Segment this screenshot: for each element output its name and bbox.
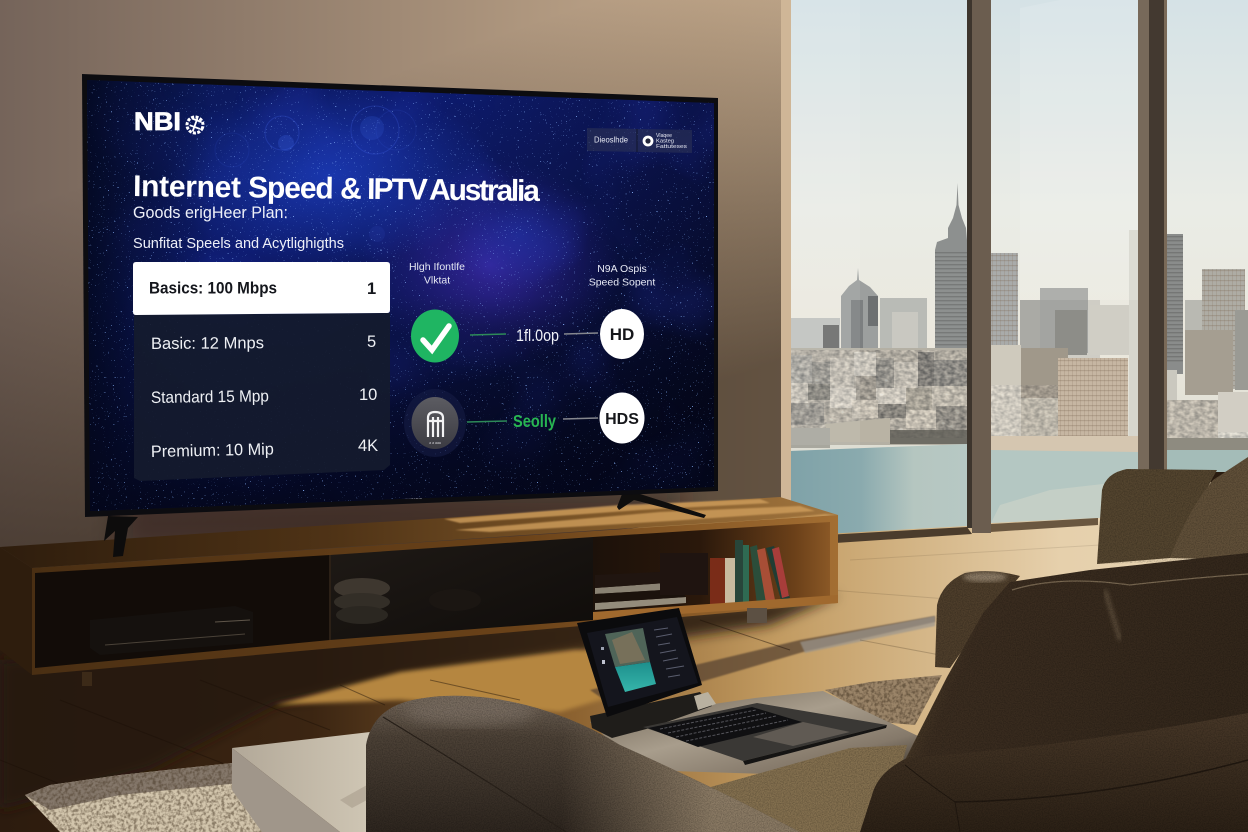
wall [0, 0, 792, 570]
trackpad [753, 722, 850, 746]
long window shadow [590, 616, 935, 704]
wall return [781, 0, 791, 510]
badge: HD: HD [610, 325, 634, 344]
open bookshelf [593, 522, 838, 620]
tan sofa seat [700, 745, 907, 832]
laptop [577, 608, 887, 765]
floor plank lines [0, 545, 1100, 832]
bridge [825, 418, 890, 438]
round tower [841, 268, 878, 348]
badge: HD [600, 309, 644, 359]
magazines [595, 582, 680, 594]
top-right badge: Fattuteses [656, 144, 687, 150]
laptop deck [643, 703, 887, 761]
title: Internet [133, 170, 241, 204]
tv stand right [617, 489, 706, 518]
subtitle: Goods erigHeer Plan: [133, 203, 288, 222]
back cushion [905, 553, 1248, 800]
title: IPTV [367, 173, 428, 207]
tv bezel [82, 74, 718, 517]
plan row: standard [151, 386, 377, 407]
column label right [589, 263, 655, 288]
plan row: premium: Premium: 10 Mip [151, 440, 274, 461]
fabric grain [366, 457, 1248, 832]
books [710, 540, 790, 605]
icon: grey arch badge [404, 389, 466, 457]
top-right badge: Vlaqee [656, 133, 672, 139]
logo emblem [185, 115, 205, 135]
plan row: standard: 10 [359, 386, 377, 404]
decorative orbs [215, 106, 416, 167]
tv brand: DIMENSION [396, 495, 422, 500]
column label right: Speed Sopent [589, 276, 655, 288]
plan list background [134, 313, 390, 481]
laptop lid [577, 608, 702, 717]
sunlight stripes on console top [444, 499, 838, 540]
console leg [747, 608, 767, 623]
media console [0, 497, 838, 686]
sunlit floor patch [275, 650, 700, 712]
tv screen [87, 80, 714, 511]
middle pane skyline [991, 230, 1138, 452]
column label left: Hlgh Ifontlfe [409, 261, 465, 273]
selected plan row [133, 262, 390, 315]
front seat cushion [860, 713, 1248, 832]
rug left [20, 760, 265, 832]
connector: scaling row: Seolly [513, 411, 556, 431]
keyboard [648, 707, 802, 747]
left pane skyline [790, 183, 967, 448]
selected plan row: 1 [367, 280, 376, 298]
coffee table side [232, 748, 340, 832]
tv stand left [104, 516, 138, 557]
television [82, 74, 718, 557]
stone stack [334, 578, 390, 624]
window with city view [781, 0, 1248, 546]
column label left: Vlktat [424, 274, 450, 286]
coffee table left top [232, 732, 370, 832]
title: & [340, 173, 361, 206]
front sofa arm [366, 696, 800, 832]
plan list panel [133, 262, 390, 481]
harbour water [790, 444, 1248, 536]
plan row: basic: 5 [367, 333, 376, 351]
top-right badge [587, 128, 692, 153]
column label left [409, 261, 465, 286]
right pane skyline [1167, 234, 1248, 452]
sofa far arm [1097, 469, 1217, 564]
badge: HDS: HDS [605, 411, 639, 428]
floor [0, 480, 1248, 832]
badge: HDS [600, 392, 644, 444]
coffee table [232, 691, 918, 832]
console top [0, 497, 838, 568]
title: Australia [429, 174, 540, 208]
rug right [825, 675, 942, 725]
console side [0, 547, 32, 675]
section label: Sunfitat Speels and Acytlighigths [133, 236, 344, 252]
sofa [366, 457, 1248, 832]
glass reflection [790, 0, 860, 445]
laptop hinge [590, 692, 712, 738]
connector: 1080p row [470, 327, 598, 345]
icon: grey arch badge: a a aaa [429, 441, 441, 445]
sky [790, 0, 1248, 460]
coffee table right top [590, 691, 918, 775]
laptop screen [587, 617, 698, 707]
plan row: standard: Standard 15 Mpp [151, 387, 269, 407]
plan row: premium [151, 437, 378, 461]
console front frame [32, 515, 838, 675]
plan row: basic [151, 333, 376, 353]
sofa near arm [935, 571, 1020, 668]
logo [134, 108, 205, 136]
low-rise city blocks [790, 348, 967, 445]
shelf board [593, 595, 838, 620]
tower: spire [935, 184, 967, 348]
top-right badge: Kasteg [656, 138, 674, 144]
receiver box [90, 606, 253, 655]
column label right: N9A Ospis [597, 263, 647, 275]
connector: 1080p row: 1fl.0op [516, 327, 559, 345]
middle glass door [330, 537, 593, 640]
plan row: premium: 4K [358, 437, 378, 455]
left compartment [35, 555, 330, 668]
logo: NBI [134, 108, 181, 136]
top-right badge: Dieoslhde [594, 136, 629, 144]
floor shadow under console [0, 595, 840, 810]
far pillow [1170, 457, 1248, 560]
icon: green check [411, 310, 459, 362]
plan row: basic: Basic: 12 Mnps [151, 334, 264, 353]
connector: scaling row [467, 411, 598, 431]
selected plan row: Basics: 100 Mbps [149, 280, 277, 298]
window frames [790, 0, 1167, 546]
title: Speed [248, 171, 333, 205]
